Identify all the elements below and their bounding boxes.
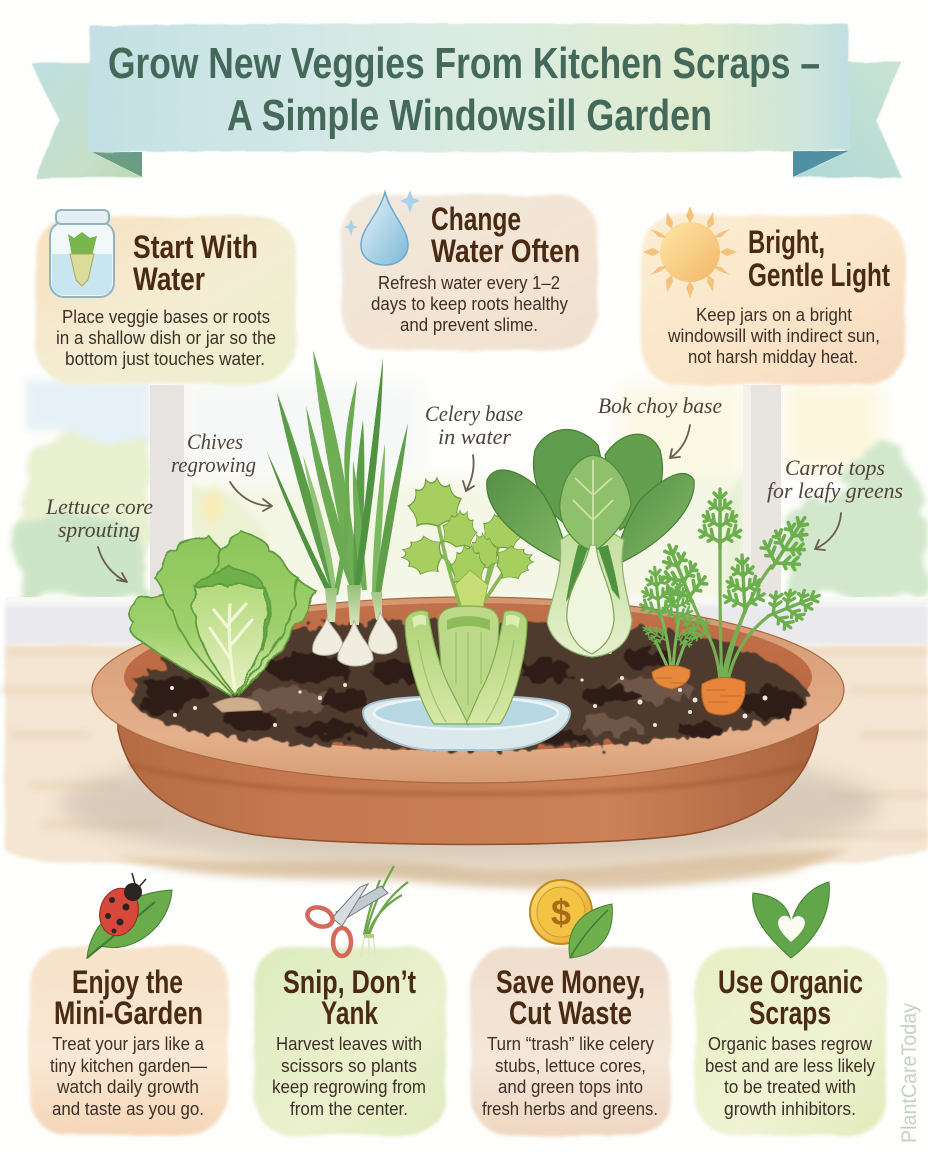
panel: change water often: and prevent slime. — [400, 314, 538, 335]
panel: save money, cut waste — [471, 880, 671, 1135]
panel: start with water: Place veggie bases or roots — [62, 306, 270, 327]
panel: snip, don't yank: scissors so plants — [281, 1055, 417, 1076]
outer stalks — [547, 520, 632, 657]
panel: bright gentle light: Keep jars on a bright — [696, 304, 852, 325]
back leaves — [533, 430, 610, 530]
right bush — [785, 440, 925, 596]
panel: start with water: in a shallow dish or jar so the — [56, 327, 276, 348]
panel: use organic scraps: Use Organic — [718, 964, 863, 1000]
panel: bright gentle light: windowsill with indirect sun, — [667, 325, 880, 346]
center leaf — [560, 455, 631, 552]
icon: ladybug on leaf — [87, 873, 172, 958]
panel: enjoy the mini-garden: Treat your jars like a — [52, 1033, 205, 1054]
panel: start with water: Water — [133, 261, 205, 297]
panel: snip, don't yank — [254, 866, 446, 1135]
right fold — [793, 151, 848, 177]
panel: enjoy the mini-garden: Mini-Garden — [54, 995, 203, 1031]
panel: bright gentle light — [641, 206, 905, 385]
arrow — [815, 513, 841, 550]
plant: chives — [267, 350, 408, 666]
panel: enjoy the mini-garden: Enjoy the — [72, 964, 183, 1000]
watermark: PlantCareToday — [898, 1003, 921, 1143]
label: lettuce core sprouting: sprouting — [58, 517, 140, 542]
icon: scissors and chives — [305, 866, 408, 957]
panel: save money, cut waste: Turn “trash” like celery — [487, 1033, 655, 1054]
label: lettuce core sprouting — [45, 494, 153, 582]
celery leaves — [400, 475, 536, 612]
label: celery base in water: in water — [438, 424, 511, 449]
label: bok choy base: Bok choy base — [598, 393, 722, 418]
icon: coin and leaf: $ — [551, 892, 571, 933]
panel: use organic scraps: Scraps — [749, 995, 831, 1031]
left fold — [92, 152, 142, 177]
label: lettuce core sprouting: Lettuce core — [45, 494, 153, 519]
panel: save money, cut waste: Save Money, — [496, 964, 645, 1000]
inner wall — [124, 603, 812, 751]
wooden table — [0, 645, 928, 889]
panel: save money, cut waste: fresh herbs and greens. — [482, 1098, 658, 1119]
label: chives regrowing — [171, 429, 272, 511]
panel: use organic scraps: best and are less likely — [705, 1055, 876, 1076]
plant: small carrot — [637, 565, 703, 689]
soil — [132, 621, 808, 750]
panel: bright gentle light: Bright, — [748, 224, 825, 260]
right tail — [793, 62, 902, 178]
panel: enjoy the mini-garden — [29, 873, 228, 1135]
title — [108, 39, 820, 140]
panel: start with water — [36, 210, 296, 384]
icon: sun — [643, 206, 737, 298]
panel: start with water: bottom just touches water. — [65, 348, 265, 369]
panel: save money, cut waste: and green tops into — [498, 1076, 643, 1097]
plant: large carrot — [649, 489, 826, 715]
arrow — [670, 425, 690, 458]
arrow — [98, 547, 127, 582]
side leaves — [487, 470, 568, 565]
panel: enjoy the mini-garden: watch daily growth — [56, 1076, 199, 1097]
icon: coin and leaf — [530, 880, 612, 958]
pot shadow on table — [60, 745, 880, 865]
panel: save money, cut waste: stubs, lettuce cores, — [495, 1055, 646, 1076]
pot body — [118, 700, 818, 844]
panel: use organic scraps: to be treated with — [724, 1076, 856, 1097]
window sill — [5, 597, 928, 645]
plant: lettuce — [128, 530, 315, 712]
panel: use organic scraps: growth inhibitors. — [724, 1098, 856, 1119]
label: celery base in water — [425, 401, 523, 491]
title: A Simple Windowsill Garden — [227, 91, 712, 140]
panel: bright gentle light: not harsh midday heat. — [688, 346, 858, 367]
shadow under rim — [130, 765, 806, 794]
icon: jar — [50, 210, 114, 297]
left bush — [20, 430, 150, 590]
panel: snip, don't yank: Snip, Don’t — [283, 964, 416, 1000]
plant: celery — [400, 475, 536, 725]
panel: enjoy the mini-garden: tiny kitchen garden— — [50, 1055, 207, 1076]
pot rim — [92, 597, 844, 783]
panel: change water often: Change — [431, 201, 521, 237]
chive blades — [267, 350, 408, 600]
panel: change water often: days to keep roots healthy — [371, 293, 569, 314]
panel: snip, don't yank: from the center. — [290, 1098, 408, 1119]
banner — [31, 24, 902, 178]
main ribbon — [88, 24, 850, 152]
terracotta pot — [92, 597, 844, 844]
chive stems — [325, 585, 382, 625]
background: sky, sun glow and garden view through window — [15, 380, 925, 605]
label: bok choy base — [598, 393, 722, 458]
panel: enjoy the mini-garden: and taste as you go. — [52, 1098, 204, 1119]
panel: change water often: Water Often — [431, 233, 580, 269]
arrow — [230, 482, 272, 511]
label: carrot tops — [767, 455, 903, 550]
dish of water — [363, 696, 570, 750]
icon: water drop — [344, 190, 420, 265]
arrow — [463, 455, 474, 491]
label: carrot tops: Carrot tops — [785, 455, 885, 480]
left tail — [31, 63, 142, 178]
panel: change water often: Refresh water every 1–2 — [378, 272, 560, 293]
celery stalks — [438, 606, 499, 725]
panel: save money, cut waste: Cut Waste — [509, 995, 632, 1031]
dark inner shadow — [566, 545, 620, 602]
panel: snip, don't yank: Harvest leaves with — [276, 1033, 422, 1054]
plant: bok choy — [487, 430, 694, 657]
panel: start with water: Start With — [133, 229, 258, 265]
chive bulbs — [313, 612, 397, 666]
icon: leaf heart — [753, 882, 829, 958]
panel: snip, don't yank: Yank — [321, 995, 378, 1031]
label: carrot tops: for leafy greens — [767, 478, 903, 503]
label: chives regrowing: Chives — [187, 429, 243, 454]
panel: snip, don't yank: keep regrowing from — [272, 1076, 426, 1097]
panel: use organic scraps — [695, 882, 887, 1135]
panel: use organic scraps: Organic bases regrow — [708, 1033, 873, 1054]
center bulb — [567, 545, 614, 654]
window frame posts — [150, 385, 781, 605]
label: celery base in water: Celery base — [425, 401, 523, 426]
label: chives regrowing: regrowing — [171, 452, 256, 477]
middle bush — [188, 490, 280, 590]
panel: change water often — [341, 190, 597, 350]
